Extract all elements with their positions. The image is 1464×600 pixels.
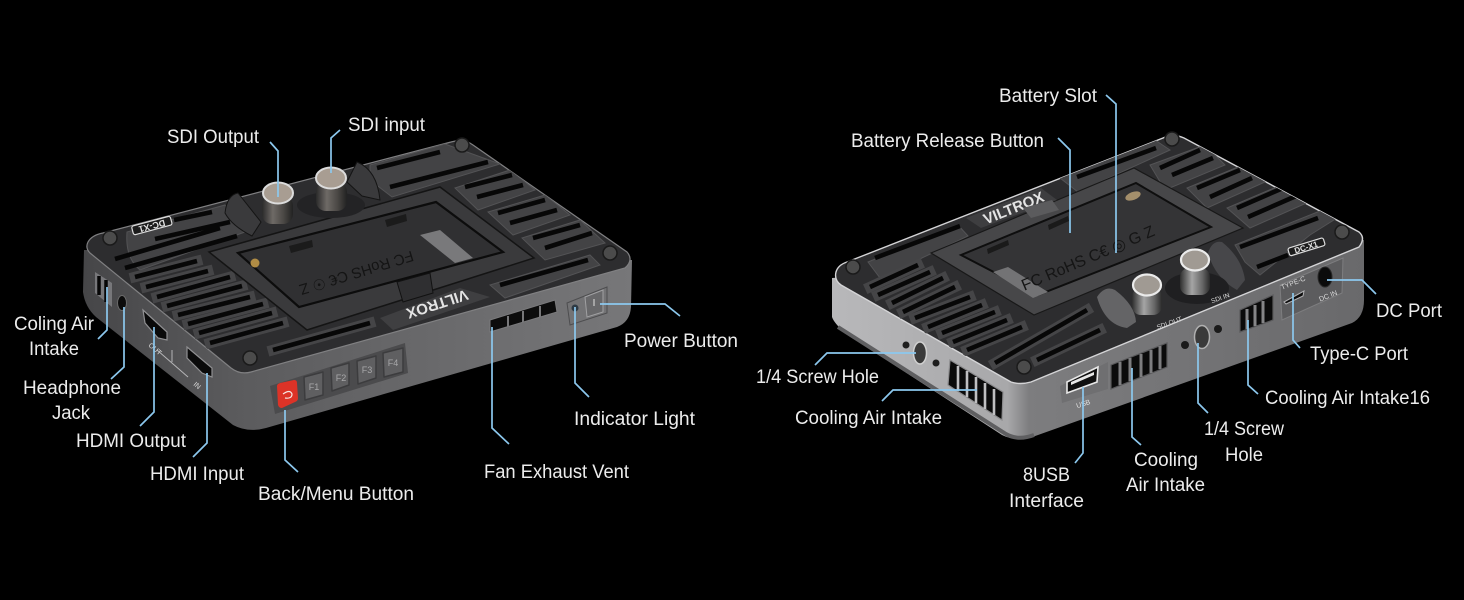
- label: Type-C Port: Type-C Port: [1310, 344, 1409, 365]
- SDI port captions: SDI OUT: [1156, 316, 1183, 331]
- device body side: [83, 250, 632, 430]
- cooling fins: [115, 144, 605, 350]
- label: Power Button: Power Button: [624, 331, 738, 352]
- front buttons: F4: [388, 358, 398, 368]
- VILTROX nameplate: [380, 286, 490, 330]
- label: Coling Air Intake: Coling Air: [14, 314, 95, 335]
- front buttons: F1: [309, 382, 319, 392]
- Type-C and DC ports panel: TYPE-C: [1280, 276, 1307, 292]
- device body side: [832, 240, 1364, 439]
- vent, jack and HDMI ports: IN: [192, 381, 202, 391]
- label: 1/4 Screw Hole (middle): Hole: [1225, 445, 1263, 466]
- vent, jack and HDMI ports: [95, 272, 212, 391]
- VILTROX nameplate: VILTROX: [981, 189, 1047, 228]
- DC-X1 badge: [131, 216, 172, 235]
- power button and indicator: [567, 287, 607, 325]
- leader lines: [98, 95, 1376, 472]
- label: Fan Exhaust Vent: Fan Exhaust Vent: [484, 462, 630, 483]
- label: HDMI Input: HDMI Input: [150, 464, 245, 485]
- top plate: [87, 141, 630, 373]
- front buttons: F3: [362, 365, 372, 375]
- BNC connectors: [1132, 250, 1229, 315]
- label: 1/4 Screw Hole (middle): [1204, 419, 1284, 466]
- left screw hole: [902, 342, 940, 366]
- label: Cooling Air Intake (middle): Air Intake: [1126, 475, 1205, 496]
- middle screw hole: [1181, 325, 1222, 349]
- SDI connector wedges: [1097, 242, 1245, 328]
- label: 1/4 Screw Hole (middle): 1/4 Screw: [1204, 419, 1284, 440]
- infographic canvas: [14, 88, 1442, 507]
- label: Cooling Air Intake (middle): Cooling: [1134, 450, 1198, 471]
- SDI port captions: SDI IN: [1210, 292, 1231, 305]
- left cooling vent: [948, 360, 1003, 420]
- Type-C and DC ports panel: DC IN: [1318, 290, 1339, 303]
- label: Battery Slot: Battery Slot: [999, 86, 1098, 107]
- DC-X1 badge: DC-X1: [1293, 240, 1319, 255]
- front buttons: [270, 343, 408, 414]
- lower edge shading: [838, 327, 1034, 438]
- label: SDI input: SDI input: [348, 115, 426, 136]
- DC-X1 badge: [1288, 238, 1325, 256]
- right cooling vent: [1240, 295, 1273, 332]
- label: 1/4 Screw Hole (left): 1/4 Screw Hole: [756, 367, 879, 388]
- label: Back/Menu Button: Back/Menu Button: [258, 484, 414, 505]
- SDI connector wedges: [225, 162, 380, 236]
- label: Battery Release Button: Battery Release Button: [851, 131, 1044, 152]
- device: front-left view: [83, 138, 632, 430]
- label: SDI Output: SDI Output: [167, 127, 260, 148]
- label: Cooling Air Intake (left): Cooling Air Intake: [795, 408, 942, 429]
- label: Coling Air Intake: [14, 314, 95, 360]
- battery plate: FC RoHS C€ ◎ G Z: [1019, 223, 1158, 295]
- label: HDMI Output: HDMI Output: [76, 431, 187, 452]
- label: Indicator Light: Indicator Light: [574, 409, 696, 430]
- label: 8USB Interface: [1009, 465, 1084, 512]
- label: Headphone Jack: Headphone: [23, 378, 121, 399]
- cooling fins: [868, 140, 1345, 363]
- Type-C and DC ports panel: [1280, 258, 1343, 320]
- label: 8USB Interface: Interface: [1009, 491, 1084, 512]
- battery plate: [931, 168, 1243, 315]
- battery plate: FC RoHS C€ ☉ Z: [297, 247, 415, 298]
- VILTROX nameplate: [966, 188, 1059, 228]
- label: Coling Air Intake: Intake: [29, 339, 79, 360]
- label: Headphone Jack: [23, 378, 121, 424]
- middle cooling vent: [1111, 343, 1167, 389]
- device: rear-right view: [832, 132, 1364, 439]
- fan exhaust vent: [490, 300, 557, 332]
- corner screws: [846, 132, 1349, 374]
- front buttons: F2: [336, 373, 346, 383]
- corner screws: [103, 138, 617, 365]
- top plate: [836, 136, 1362, 384]
- label: DC Port: DC Port: [1376, 301, 1443, 322]
- vent, jack and HDMI ports: OUT: [147, 342, 163, 357]
- DC-X1 badge: DC-X1: [138, 218, 166, 234]
- label: Cooling Air Intake16: Cooling Air Intake16: [1265, 388, 1430, 409]
- label: Cooling Air Intake (middle): [1126, 450, 1205, 496]
- labels: [14, 86, 1443, 512]
- label: 8USB Interface: 8USB: [1023, 465, 1070, 486]
- BNC connectors: [262, 168, 365, 224]
- VILTROX nameplate: VILTROX: [404, 286, 470, 321]
- USB port: USB: [1076, 399, 1092, 410]
- battery plate: [209, 187, 534, 330]
- USB port: [1060, 362, 1108, 410]
- SDI port captions: [1156, 292, 1231, 331]
- label: Headphone Jack: Jack: [52, 403, 90, 424]
